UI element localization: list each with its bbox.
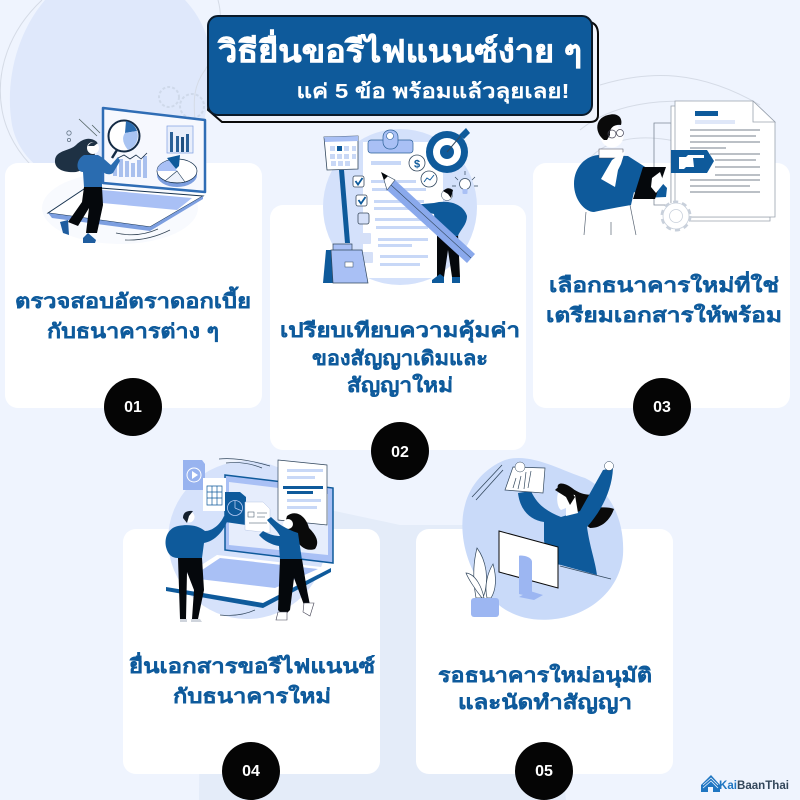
document text lines: [690, 130, 760, 192]
back document: [654, 123, 671, 205]
potted plant: [466, 548, 499, 617]
card 4 text: กับธนาคารใหม่: [173, 684, 331, 708]
illustration 4: two people working with a large laptop: [166, 459, 333, 622]
card 5 text: รอธนาคารใหม่อนุมัติ: [438, 663, 652, 688]
front document: [675, 101, 775, 217]
pointing hand tag: [671, 150, 714, 173]
light bulb: [452, 171, 478, 194]
checkboxes: [353, 176, 373, 263]
target with arrow: [426, 128, 470, 173]
table document: [203, 478, 226, 511]
card 2 text: [280, 319, 520, 397]
tablet: [633, 167, 666, 199]
laptop base: [48, 187, 203, 227]
card 4 background: [123, 529, 380, 774]
number badge 02: [371, 422, 429, 480]
card 5 text: [438, 663, 652, 714]
number badge 05: [515, 742, 573, 800]
pencil: [381, 172, 475, 263]
illustration 2: checklist, target and man with pencil: [323, 128, 478, 285]
logo KaiBaanThai: [701, 775, 789, 792]
card 3 background: [533, 163, 790, 408]
title banner: [208, 16, 598, 122]
banner subtitle: แค่ 5 ข้อ พร้อมแล้วลุยเลย!: [296, 80, 570, 104]
number badge 02: 02: [391, 444, 409, 461]
card 4 text: [129, 651, 376, 708]
card 1 text: [15, 286, 251, 343]
clipboard paper: [363, 142, 443, 278]
illustration 3: man with tablet and documents: [574, 101, 775, 235]
coin dollar: [409, 155, 425, 171]
form document: [245, 502, 270, 533]
number badge 01: 01: [124, 399, 142, 416]
background lower shape: [165, 505, 566, 800]
magnifier with pie: [108, 120, 140, 158]
woman figure: [55, 139, 120, 243]
card 5 background: [416, 529, 673, 774]
number badge 03: [633, 378, 691, 436]
number badge 01: [104, 378, 162, 436]
laptop base: [167, 555, 330, 603]
card 3 text: [546, 270, 782, 327]
calendar on pole: [324, 136, 358, 243]
card 4 text: ยื่นเอกสารขอรีไฟแนนซ์: [129, 651, 376, 678]
coin dollar: $: [414, 158, 420, 170]
laptop screen: [103, 108, 205, 192]
monitor: [499, 531, 558, 600]
card 2 background: [270, 205, 526, 450]
illustration 5: woman celebrating behind monitor: [462, 458, 623, 620]
card 2 text: สัญญาใหม่: [347, 373, 453, 397]
list panel: [278, 460, 327, 525]
pie document: [225, 492, 246, 525]
bar chart: [167, 126, 193, 153]
line chart bars: [113, 153, 147, 178]
trend bubble: [421, 171, 437, 187]
clipboard clip: [368, 130, 413, 153]
card 3 text: เลือกธนาคารใหม่ที่ใช่: [549, 270, 780, 297]
briefcase: [323, 244, 368, 283]
gear: [662, 202, 690, 230]
pie chart: [157, 155, 197, 187]
banner title: วิธียื่นขอรีไฟแนนซ์ง่าย ๆ: [217, 29, 582, 69]
number badge 04: 04: [242, 763, 260, 780]
woman figure: [518, 462, 614, 575]
banner panel: [208, 16, 592, 115]
man figure: [166, 511, 228, 622]
card 1 text: ตรวจสอบอัตราดอกเบี้ย: [15, 286, 251, 313]
icon: house: [701, 775, 720, 792]
logo text: KaiBaanThai: [719, 778, 789, 792]
card 3 text: เตรียมเอกสารให้พร้อม: [546, 303, 782, 327]
list lines: [371, 161, 428, 266]
card 1 text: กับธนาคารต่าง ๆ: [47, 321, 219, 343]
woman figure: [259, 513, 317, 620]
raised paper: [505, 462, 545, 493]
number badge 05: 05: [535, 763, 553, 780]
man figure: [574, 114, 667, 235]
card 5 text: และนัดทำสัญญา: [458, 692, 632, 714]
man holding pencil: [411, 188, 467, 283]
background blob top left: [10, 0, 211, 192]
number badge 04: [222, 742, 280, 800]
number badge 03: 03: [653, 399, 671, 416]
illustration 1: woman analysing charts on laptop: [42, 87, 205, 244]
banner shadow: [208, 22, 598, 122]
card 2 text: ของสัญญาเดิมและ: [312, 348, 488, 370]
laptop screen: [225, 475, 333, 563]
card 1 background: [5, 163, 262, 408]
video document: [183, 460, 205, 490]
card 2 text: เปรียบเทียบความคุ้มค่า: [280, 319, 520, 343]
